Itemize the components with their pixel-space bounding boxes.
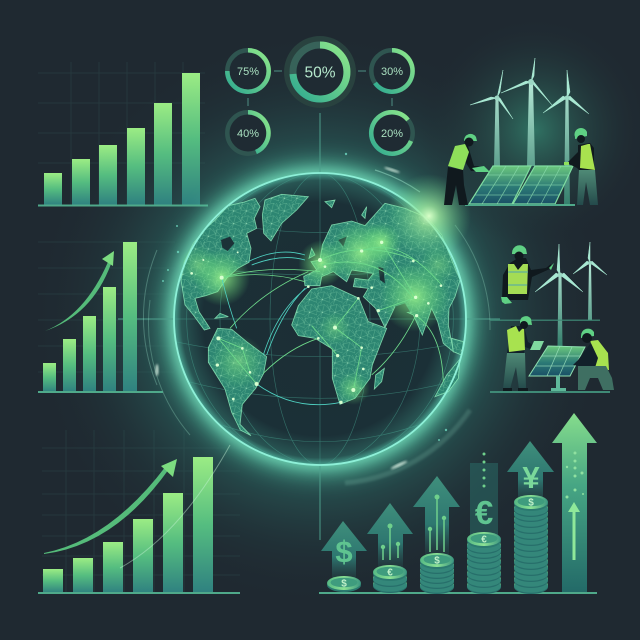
wind turbines: middle right	[490, 242, 607, 346]
growth arrow	[45, 251, 114, 331]
bar chart: middle left	[38, 242, 163, 393]
progress rings	[227, 36, 413, 154]
stack 2: €	[387, 568, 393, 578]
column with euro	[470, 452, 498, 538]
stack 1: $	[341, 578, 347, 590]
stack 5: $	[528, 498, 534, 508]
worker: upper middle	[501, 245, 554, 304]
solar panel: lower middle	[529, 346, 585, 391]
floating particles	[162, 153, 447, 498]
flight routes	[218, 242, 443, 405]
arrow 5 with yen: ¥	[522, 460, 540, 495]
arrow 1 with dollar: $	[335, 534, 353, 569]
bar: investment growth arrows	[321, 413, 597, 592]
globe	[173, 173, 467, 465]
ring: 30%	[371, 50, 413, 92]
bar chart: bottom left	[38, 445, 240, 594]
wind turbines: top right	[470, 58, 589, 205]
stack 3	[420, 553, 454, 594]
arrow 1 with dollar	[321, 521, 367, 580]
network nodes	[190, 241, 442, 404]
chart grids	[38, 62, 240, 592]
worker: top right	[564, 128, 598, 205]
inland seas	[221, 237, 410, 313]
ring: 40%	[227, 112, 269, 154]
ring: 40%: 40%	[237, 128, 259, 140]
ring: 50%	[284, 36, 356, 108]
arrow 2	[367, 503, 413, 568]
coin stacks	[319, 495, 597, 594]
axis lines through globe	[118, 113, 500, 540]
stack 1	[327, 576, 361, 592]
ring: 75%: 75%	[237, 66, 259, 78]
ring: 75%	[227, 50, 269, 92]
stack 3: $	[434, 556, 440, 566]
column with euro: €	[475, 494, 493, 531]
stack 4	[467, 532, 501, 594]
ring: 30%: 30%	[381, 66, 403, 78]
globe bright flare	[387, 174, 471, 258]
ring: 50%: 50%	[304, 64, 336, 82]
stack 2	[373, 565, 407, 593]
growth arrow	[44, 459, 177, 554]
arrow 3	[413, 476, 460, 556]
worker: top left	[444, 134, 490, 205]
worker: kneeling	[573, 329, 614, 390]
ring: 20%	[371, 112, 413, 154]
solar panels: top right	[465, 166, 575, 206]
ground line: middle right	[490, 391, 610, 393]
arrow 5 with yen	[507, 441, 554, 505]
ring: 20%: 20%	[381, 128, 403, 140]
hub glows	[178, 221, 458, 405]
arrow 6 tall	[552, 413, 597, 592]
globe outer glow	[162, 161, 478, 477]
bar chart: top left	[38, 73, 208, 206]
stack 4: €	[481, 534, 487, 546]
stack 5	[514, 495, 548, 594]
orbit swooshes	[143, 166, 490, 483]
worker: lower left with tablet	[503, 316, 544, 391]
